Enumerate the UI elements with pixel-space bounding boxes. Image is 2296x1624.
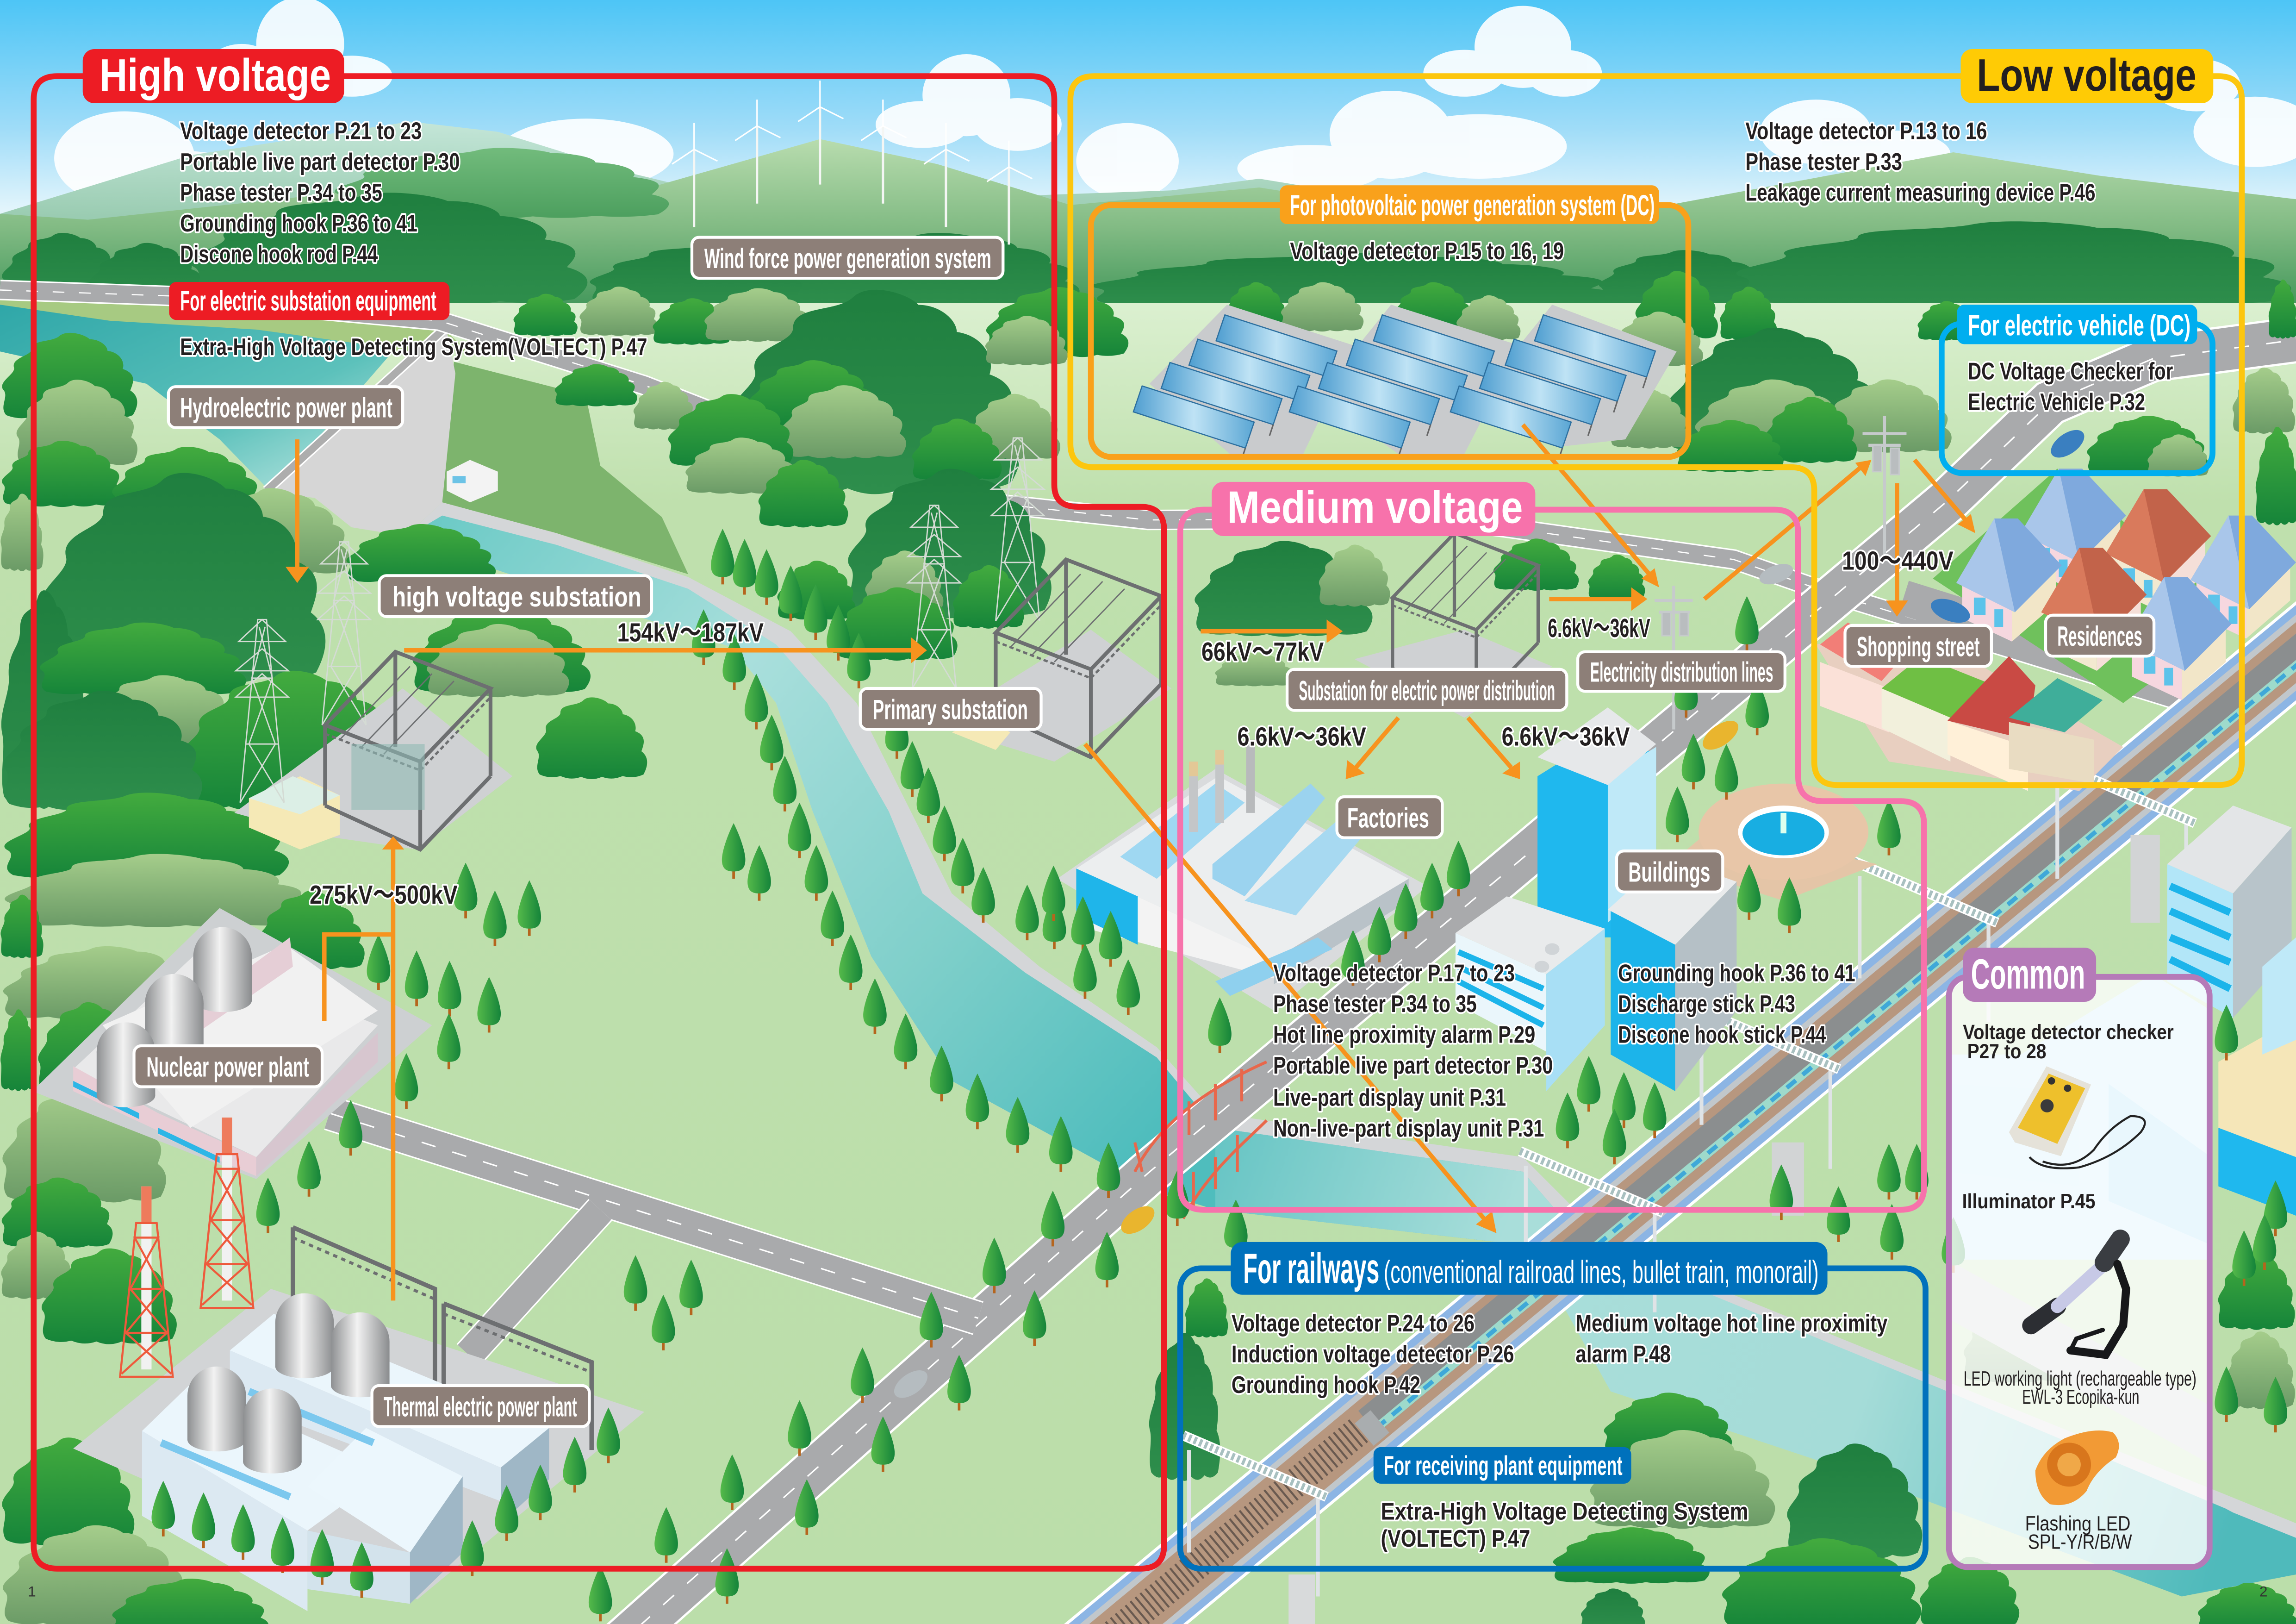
text block: medium voltage products left: Portable live part detector P.30 (1273, 1052, 1553, 1079)
high voltage substation (234, 542, 512, 849)
panel: medium voltage (1180, 510, 1924, 1210)
text block: common products: EWL-3 Ecopika-kun (2022, 1386, 2139, 1408)
panel: electric vehicle (1941, 324, 2213, 473)
text block: medium voltage products left: Phase tester P.34 to 35 (1273, 991, 1477, 1018)
heading: receiving plant equipment: For receiving plant equipment (1384, 1451, 1623, 1481)
text block: voltect railway (1381, 1498, 1748, 1552)
callout: residences (2046, 615, 2154, 656)
callout: primary substation (860, 688, 1041, 730)
panel: photovoltaic (1091, 205, 1688, 457)
voltage labels (310, 546, 1954, 910)
callout: buildings: Buildings (1628, 857, 1710, 888)
heading: photovoltaic (1280, 185, 1659, 224)
voltage labels: 275kV～500kV (310, 880, 458, 910)
callout: residences: Residences (2057, 621, 2142, 652)
callout: buildings (1617, 851, 1723, 892)
text block: medium voltage products left: Voltage detector P.17 to 23 (1273, 960, 1515, 987)
text block: high voltage products: Discone hook rod P.44 (180, 241, 378, 268)
heading: electric substation equipment (169, 282, 449, 320)
text block: high voltage products: Grounding hook P.36 to 41 (180, 210, 417, 237)
text block: electric vehicle products (1968, 358, 2173, 416)
heading: photovoltaic: For photovoltaic power generation system (DC) (1290, 189, 1655, 222)
text block: railway products left (1232, 1310, 1514, 1399)
callout: nuclear (134, 1046, 322, 1087)
callout: nuclear: Nuclear power plant (146, 1051, 309, 1082)
text block: common products: Flashing LED (2025, 1512, 2130, 1535)
callout: wind force: Wind force power generation system (704, 243, 991, 274)
callout: primary substation: Primary substation (873, 694, 1028, 725)
heading: medium voltage: Medium voltage (1227, 481, 1523, 532)
text block: medium voltage products right: Discharge stick P.43 (1618, 991, 1795, 1018)
panel: common (1949, 977, 2209, 1567)
text block: high voltage products: Voltage detector P.21 to 23 (180, 118, 422, 145)
page numbers: 1 (28, 1583, 36, 1600)
text block: railway products right (1575, 1310, 1887, 1368)
distribution poles (1655, 416, 1906, 730)
text block: railway products left: Induction voltage detector P.26 (1232, 1341, 1514, 1368)
text block: medium voltage products left: Live-part display unit P.31 (1273, 1085, 1506, 1112)
text block: electric vehicle products: Electric Vehicle P.32 (1968, 389, 2145, 416)
foreground trees (151, 529, 2287, 1621)
railway piers and gantries (1183, 762, 2195, 1624)
residences (1933, 468, 2296, 703)
callout: distribution lines: Electricity distribution lines (1590, 657, 1773, 688)
text block: common products: Voltage detector checker (1963, 1021, 2174, 1044)
text block: low voltage products (1745, 118, 2096, 206)
heading: low voltage: Low voltage (1977, 50, 2196, 100)
page numbers (28, 1583, 2267, 1600)
sky background (0, 0, 2296, 214)
voltage labels: 6.6kV～36kV (1502, 722, 1630, 751)
text block: medium voltage products left (1273, 960, 1553, 1142)
icon: flashing led (2035, 1430, 2119, 1505)
page numbers: 2 (2259, 1583, 2267, 1600)
distribution substation (1355, 533, 1552, 718)
shopping street (1816, 623, 2123, 791)
callout: hydroelectric (168, 387, 403, 428)
voltage labels: 66kV～77kV (1201, 637, 1324, 667)
text block: medium voltage products left: Non-live-part display unit P.31 (1273, 1115, 1544, 1142)
panel: high voltage (34, 76, 1164, 1568)
voltage labels: 100～440V (1842, 546, 1954, 576)
clouds (54, 0, 2296, 215)
callout: hydroelectric: Hydroelectric power plant (180, 393, 392, 424)
text block: common products: SPL-Y/R/B/W (2028, 1531, 2132, 1554)
text block: electric vehicle products: DC Voltage Checker for (1968, 358, 2173, 385)
common box background buildings (1948, 974, 2211, 1465)
text block: high voltage products: Phase tester P.34 to 35 (180, 179, 382, 206)
callout: distribution lines (1578, 652, 1785, 691)
callout: distribution substation (1287, 669, 1567, 710)
text block: medium voltage products right: Grounding hook P.36 to 41 (1618, 960, 1855, 987)
heading: electric vehicle: For electric vehicle (DC) (1968, 310, 2190, 342)
text block: common products: P27 to 28 (1967, 1040, 2047, 1063)
text block: voltect railway: (VOLTECT) P.47 (1381, 1525, 1530, 1552)
panel: railways (1180, 1268, 1926, 1568)
city buildings (1456, 707, 2296, 1216)
text block: high voltage products: Portable live part detector P.30 (180, 149, 460, 175)
text block: voltect railway: Extra-High Voltage Detecting System (1381, 1498, 1748, 1525)
solar panel array (1133, 305, 1677, 459)
text block: medium voltage products right: Discone hook stick P.44 (1618, 1022, 1826, 1049)
callout: wind force (692, 237, 1003, 278)
text block: medium voltage products left: Hot line proximity alarm P.29 (1273, 1022, 1535, 1049)
river (403, 502, 2296, 1597)
text block: high voltage products (180, 118, 460, 268)
panel: low voltage (1070, 76, 2242, 785)
heading: common (1963, 948, 2096, 1002)
text block: railway products left: Grounding hook P.42 (1232, 1372, 1420, 1399)
callout: high voltage substation (379, 575, 652, 617)
text block: low voltage products: Leakage current measuring device P.46 (1745, 179, 2096, 206)
icon: led working light (2031, 1239, 2126, 1355)
text block: common products: Illuminator P.45 (1962, 1190, 2096, 1213)
voltage labels: 6.6kV～36kV (1237, 722, 1366, 751)
arrows (286, 425, 1975, 1300)
heading: high voltage: High voltage (100, 50, 331, 100)
callout: factories (1337, 797, 1442, 838)
text: voltect high: Extra-High Voltage Detecting System(VOLTECT) P.47 (180, 334, 647, 361)
text: Substation for electric power distribution (1299, 675, 1555, 706)
callout: shopping street (1845, 625, 1991, 667)
heading: for railways: (conventional railroad lines, bullet train, monorail) (1384, 1254, 1819, 1290)
text block: low voltage products: Voltage detector P.13 to 16 (1745, 118, 1987, 145)
primary substation (908, 438, 1171, 762)
bridge (1135, 1062, 1267, 1218)
heading: electric substation equipment: For electric substation equipment (180, 286, 436, 317)
factory (1057, 740, 1428, 1011)
callout: high voltage substation: high voltage substation (392, 581, 641, 612)
callout: thermal (372, 1386, 589, 1427)
heading: electric vehicle (1957, 305, 2197, 344)
callout: factories: Factories (1347, 803, 1429, 834)
text block: common products (1962, 1021, 2196, 1554)
text block: railway products right: Medium voltage hot line proximity (1575, 1310, 1887, 1337)
nuclear power plant (32, 908, 432, 1179)
icon: voltage detector checker (2009, 1066, 2145, 1168)
railway (1025, 614, 2296, 1624)
heading: common: Common (1971, 951, 2085, 998)
text block: medium voltage products right (1618, 960, 1855, 1049)
voltage labels: 6.6kV～36kV (1548, 613, 1650, 643)
heading: receiving plant equipment (1374, 1447, 1631, 1484)
text block: low voltage products: Phase tester P.33 (1745, 149, 1902, 175)
text block: railway products right: alarm P.48 (1575, 1341, 1671, 1368)
text block: railway products left: Voltage detector P.24 to 26 (1232, 1310, 1475, 1337)
callout: shopping street: Shopping street (1857, 631, 1980, 662)
text: photovoltaic products: Voltage detector P.15 to 16, 19 (1290, 238, 1564, 265)
voltage labels: 154kV～187kV (617, 618, 764, 648)
lake and dam (0, 287, 688, 574)
wind turbines (672, 81, 1033, 244)
mountains (0, 122, 2296, 315)
callout: thermal: Thermal electric power plant (384, 1391, 577, 1422)
heading: for railways (1231, 1242, 1828, 1295)
cars (890, 425, 2089, 1404)
thermal power plant (73, 1118, 644, 1611)
heading: for railways: For railways (1243, 1245, 1379, 1292)
